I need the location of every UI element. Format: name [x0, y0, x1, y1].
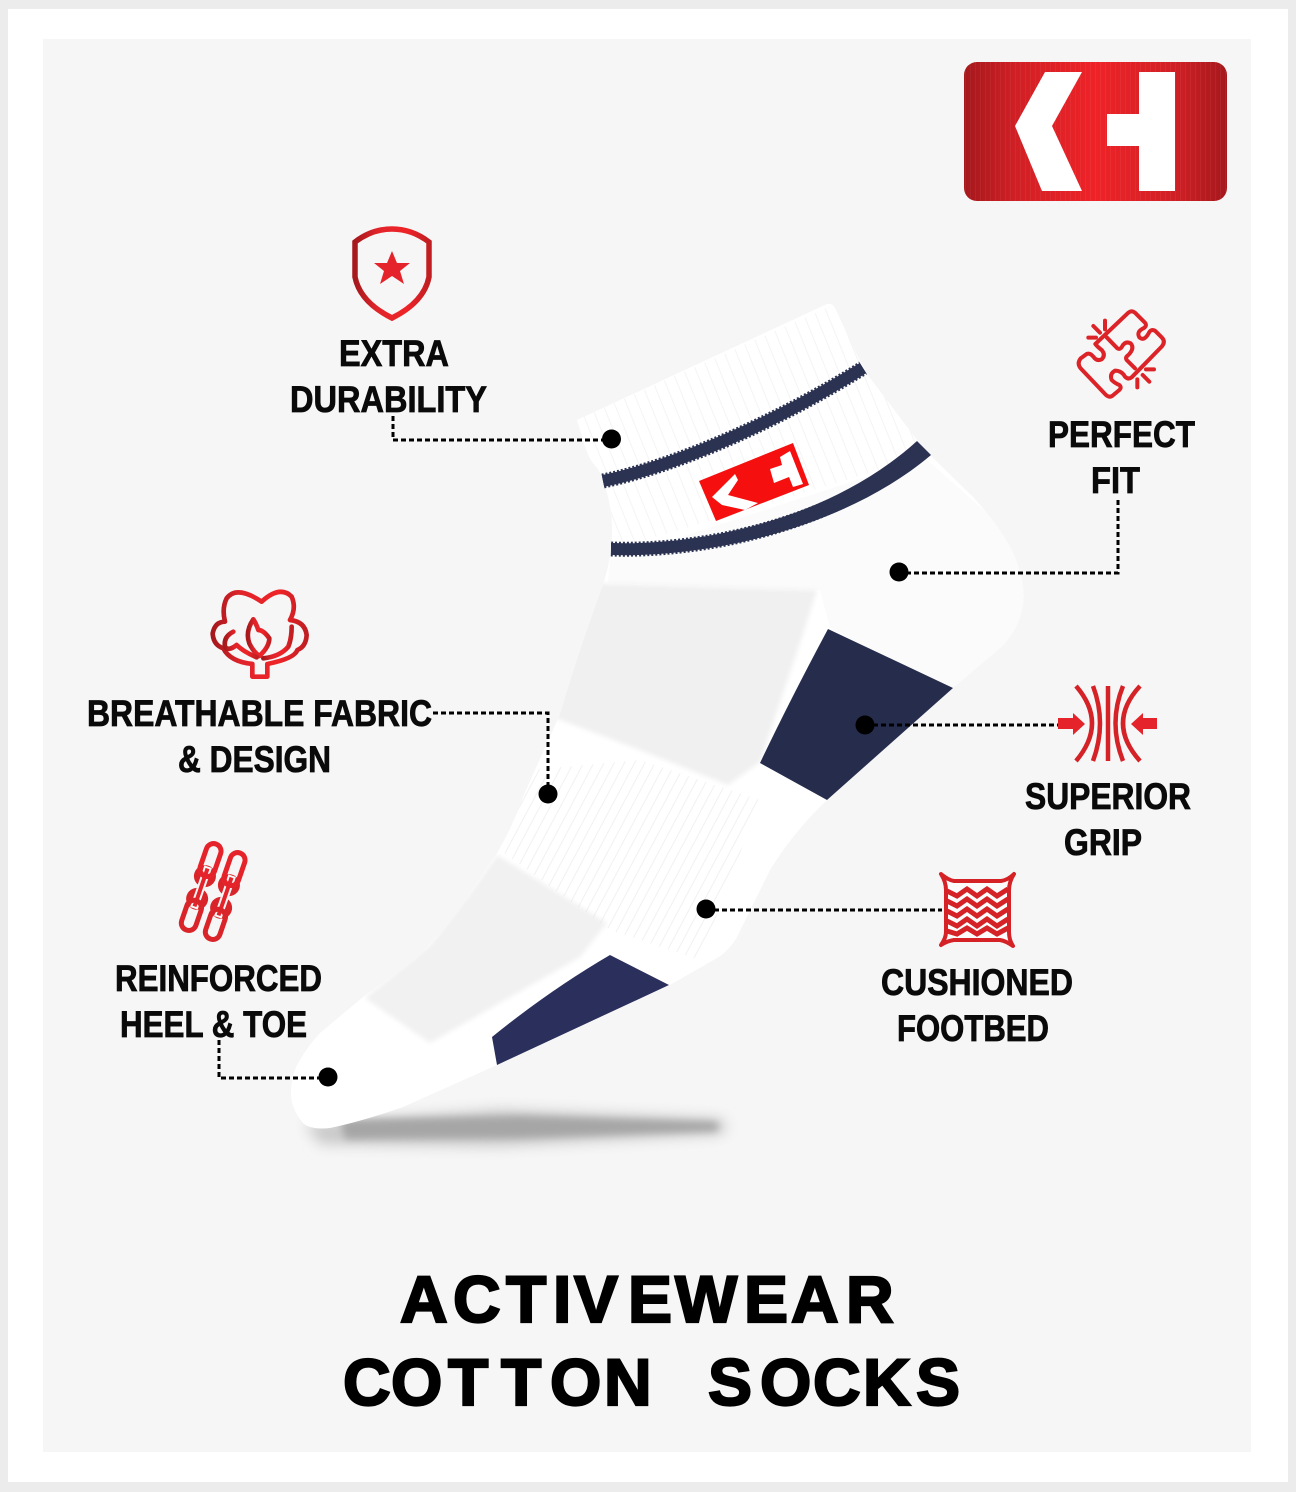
icon: cotton boll	[213, 592, 307, 677]
label: extra durability	[290, 333, 487, 420]
label: reinforced heel and toe: HEEL & TOE	[120, 1004, 307, 1045]
icon: pillow	[941, 874, 1014, 946]
label: reinforced heel and toe: REINFORCED	[115, 958, 322, 999]
title: ACTIVEWEAR	[400, 1262, 894, 1336]
label: superior grip: GRIP	[1064, 822, 1142, 863]
title: COTTON	[343, 1345, 652, 1419]
label: cushioned footbed: CUSHIONED	[881, 962, 1073, 1003]
woven red logo	[699, 443, 809, 521]
icon: shield with star	[355, 229, 429, 318]
connector: reinforced heel and toe	[219, 1040, 338, 1086]
logo badge	[964, 62, 1227, 201]
label: breathable fabric and design: & DESIGN	[178, 739, 331, 780]
label: superior grip: SUPERIOR	[1025, 776, 1191, 817]
connector: perfect fit	[890, 500, 1118, 582]
connector: breathable fabric	[433, 713, 558, 804]
connector: cushioned footbed	[696, 900, 942, 918]
cuff ribbing	[584, 308, 915, 542]
lower navy stripe	[611, 441, 931, 555]
icon: chain links	[176, 840, 250, 943]
sock illustration	[291, 304, 1040, 1128]
label: cushioned footbed	[881, 962, 1073, 1049]
upper mesh panel	[550, 583, 817, 785]
label: perfect fit: FIT	[1091, 460, 1140, 501]
connector: superior grip	[856, 716, 1058, 734]
sock shadow	[305, 1110, 726, 1146]
navy heel patch	[760, 629, 953, 800]
lower mesh panel	[365, 855, 607, 1043]
label: breathable fabric and design	[87, 693, 432, 780]
label: perfect fit	[1048, 414, 1195, 501]
heel and ankle shading	[608, 458, 1040, 690]
label: extra durability: EXTRA	[339, 333, 449, 374]
label: extra durability: DURABILITY	[290, 379, 487, 420]
icon: puzzle pieces	[1079, 311, 1164, 397]
upper navy stripe	[603, 368, 863, 481]
title	[343, 1262, 960, 1419]
label: perfect fit: PERFECT	[1048, 414, 1195, 455]
connector: extra durability	[393, 416, 621, 448]
label: cushioned footbed: FOOTBED	[897, 1008, 1049, 1049]
foot ribbing	[500, 760, 760, 960]
label: breathable fabric and design: BREATHABLE FABRIC	[87, 693, 432, 734]
icon: compression arcs and arrows	[1058, 686, 1157, 761]
label: superior grip	[1025, 776, 1191, 863]
label: reinforced heel and toe	[115, 958, 322, 1045]
title: SOCKS	[708, 1345, 960, 1419]
navy toe patch	[492, 955, 669, 1065]
